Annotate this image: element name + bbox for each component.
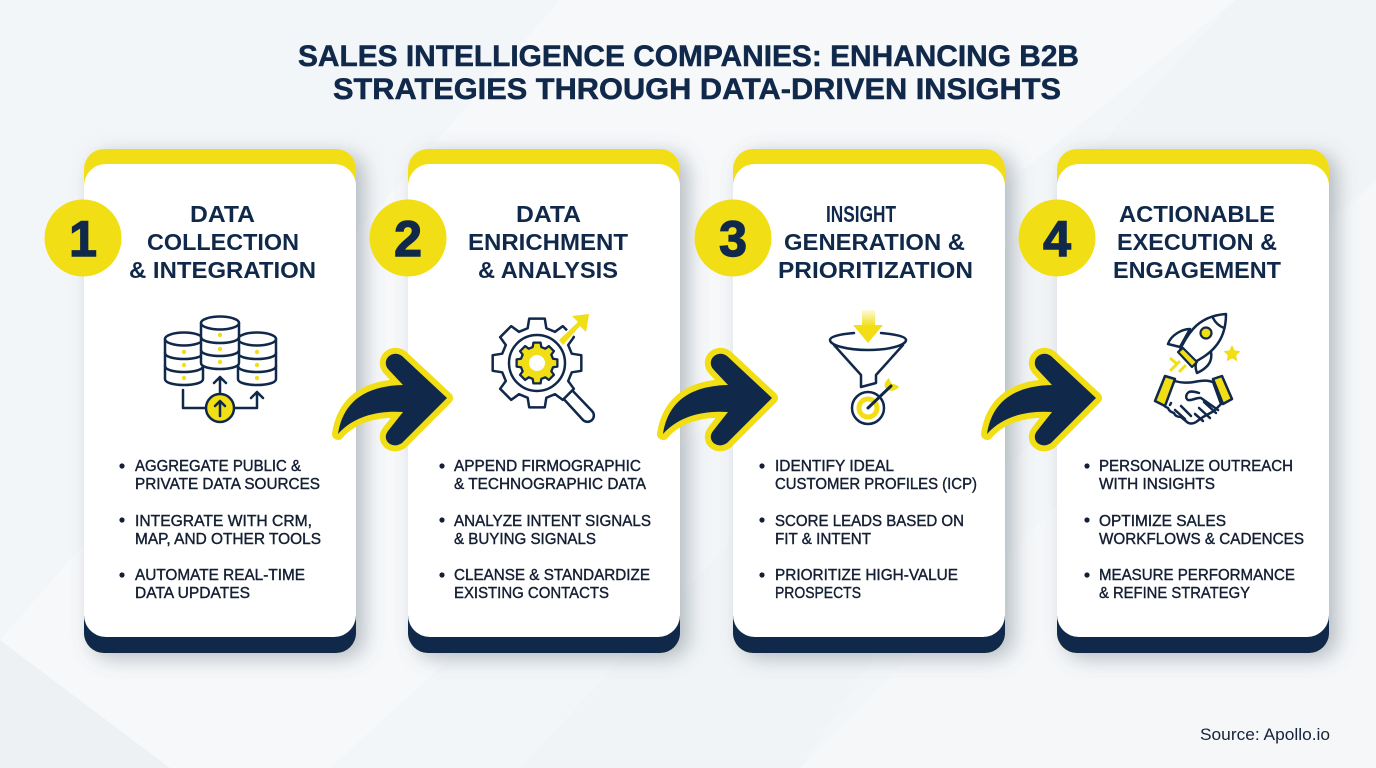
- bullets: step 1: DATA UPDATES: [135, 585, 250, 602]
- heading: data collection: [129, 201, 316, 283]
- heading: actionable execution: [1113, 201, 1282, 283]
- bullets: step 3: [759, 458, 977, 602]
- bullets: step 2: EXISTING CONTACTS: [454, 585, 609, 602]
- arrow: step 3 to 4: [987, 354, 1096, 445]
- heading: insight generation: GENERATION &: [784, 229, 965, 255]
- number badge 4: 4: [1043, 211, 1071, 267]
- number badge 3: 3: [719, 211, 747, 267]
- bullets: step 3: FIT & INTENT: [775, 531, 872, 548]
- panel: step 2 data enrichment: [370, 149, 680, 653]
- heading: data enrichment: DATA: [516, 201, 581, 227]
- bullets: step 4: & REFINE STRATEGY: [1099, 585, 1250, 602]
- heading: data enrichment: ENRICHMENT: [468, 229, 629, 255]
- bullets: step 2: & BUYING SIGNALS: [454, 531, 596, 548]
- heading: data enrichment: & ANALYSIS: [478, 257, 618, 283]
- bullets: step 3: PRIORITIZE HIGH-VALUE: [775, 567, 958, 584]
- bullets: step 1: INTEGRATE WITH CRM,: [135, 513, 312, 530]
- heading: actionable execution: EXECUTION &: [1117, 229, 1277, 255]
- number badge 3: [694, 200, 772, 276]
- bullets: step 4: OPTIMIZE SALES: [1099, 513, 1226, 530]
- bullets: step 1: MAP, AND OTHER TOOLS: [135, 531, 321, 548]
- bullets: step 4: WORKFLOWS & CADENCES: [1099, 531, 1304, 548]
- title: STRATEGIES THROUGH DATA-DRIVEN INSIGHTS: [333, 73, 1061, 106]
- heading: actionable execution: ENGAGEMENT: [1113, 257, 1282, 283]
- bullets: step 1: PRIVATE DATA SOURCES: [135, 476, 320, 493]
- panel: step 3 insight generation: [694, 149, 1005, 653]
- heading: actionable execution: ACTIONABLE: [1119, 201, 1275, 227]
- bullets: step 4: [1084, 458, 1304, 602]
- title: [298, 40, 1079, 106]
- panel: step 4 actionable execution: [1018, 149, 1329, 653]
- bullets: step 4: PERSONALIZE OUTREACH: [1099, 458, 1293, 475]
- arrow: step 2 to 3: [663, 354, 772, 445]
- bullets: step 1: AUTOMATE REAL-TIME: [135, 567, 305, 584]
- title: SALES INTELLIGENCE COMPANIES: ENHANCING B2B: [298, 40, 1079, 73]
- heading: data collection: & INTEGRATION: [129, 257, 316, 283]
- heading: data collection: DATA: [190, 201, 255, 227]
- heading: insight generation: [778, 201, 973, 283]
- heading: insight generation: PRIORITIZATION: [778, 257, 973, 283]
- number badge 2: 2: [394, 211, 422, 267]
- bullets: step 2: CLEANSE & STANDARDIZE: [454, 567, 650, 584]
- bullets: step 2: [439, 458, 651, 602]
- heading: data collection: COLLECTION: [147, 229, 299, 255]
- heading: insight generation: INSIGHT: [826, 201, 896, 227]
- bullets: step 3: PROSPECTS: [775, 585, 861, 602]
- bullets: step 2: & TECHNOGRAPHIC DATA: [454, 476, 647, 493]
- bullets: step 2: APPEND FIRMOGRAPHIC: [454, 458, 641, 475]
- bullets: step 1: AGGREGATE PUBLIC &: [135, 458, 302, 475]
- number badge 2: [370, 200, 446, 276]
- bullets: step 3: SCORE LEADS BASED ON: [775, 513, 964, 530]
- icon: funnel and target: [830, 310, 906, 424]
- number badge 4: [1018, 200, 1096, 276]
- panel: step 1 data collection: [44, 149, 356, 653]
- heading: data enrichment: [468, 201, 629, 283]
- source note: Source: Apollo.io: [1200, 725, 1330, 744]
- bullets: step 2: ANALYZE INTENT SIGNALS: [454, 513, 651, 530]
- bullets: step 4: WITH INSIGHTS: [1099, 476, 1215, 493]
- icon: gear and magnifier: [493, 314, 594, 422]
- bullets: step 4: MEASURE PERFORMANCE: [1099, 567, 1295, 584]
- arrow: step 1 to 2: [338, 354, 447, 445]
- icon: databases: [165, 316, 276, 422]
- icon: rocket and handshake: [1155, 314, 1240, 424]
- bullets: step 3: IDENTIFY IDEAL: [775, 458, 894, 475]
- number badge 1: [44, 200, 122, 276]
- bullets: step 1: [119, 458, 321, 602]
- number badge 1: 1: [69, 211, 97, 267]
- bullets: step 3: CUSTOMER PROFILES (ICP): [775, 476, 977, 493]
